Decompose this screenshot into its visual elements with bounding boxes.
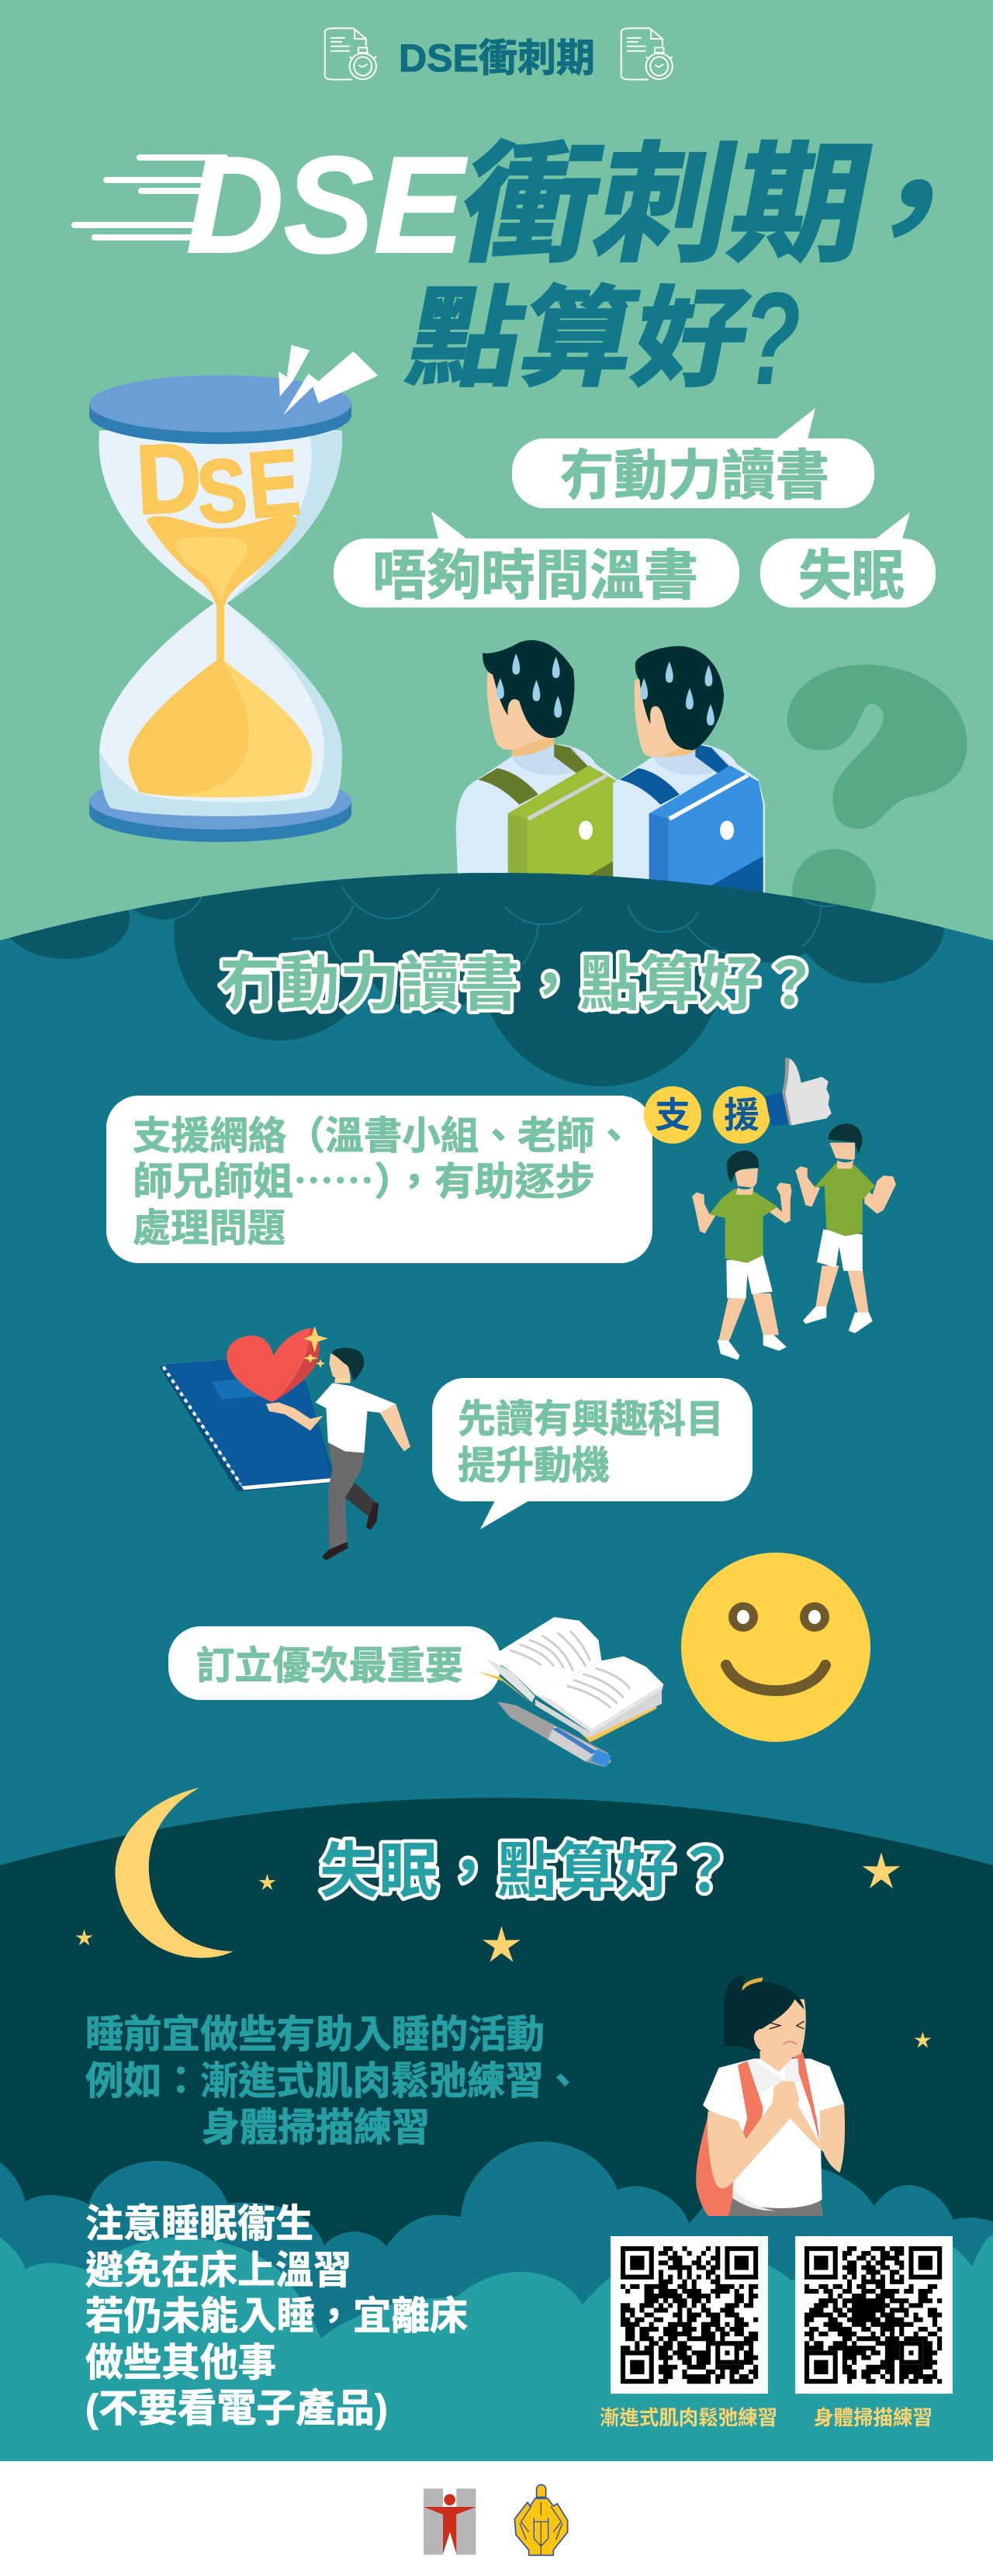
callout: support network: 師兄師姐……），有助逐步 bbox=[133, 1151, 595, 1207]
callout: interest subjects: 先讀有興趣科目 bbox=[458, 1397, 724, 1441]
support badges: 援 bbox=[724, 1095, 759, 1135]
callout: support network: 處理問題 bbox=[133, 1207, 285, 1250]
student front-left bbox=[692, 1151, 791, 1360]
text block: bedtime activities: 睡前宜做些有助入睡的活動 bbox=[85, 2013, 545, 2056]
night section background bbox=[0, 1798, 993, 2483]
cloud layer front bbox=[0, 2235, 993, 2463]
dark scalloped canopy bbox=[11, 873, 945, 1086]
support badges: 支 bbox=[655, 1095, 690, 1135]
section heading: insomnia: 失眠，點算好？ bbox=[320, 1837, 735, 1905]
title line two: 點算好 bbox=[399, 278, 759, 400]
glass bbox=[99, 431, 342, 816]
student left with green backpack bbox=[456, 640, 624, 912]
book bbox=[535, 1704, 657, 1743]
notebook bbox=[160, 1353, 336, 1491]
text block: sleep hygiene: 若仍未能入睡，宜離床 bbox=[85, 2294, 468, 2338]
two students cheering bbox=[692, 1124, 896, 1360]
girl thinking bbox=[696, 1975, 845, 2216]
text block: sleep hygiene: 做些其他事 bbox=[85, 2341, 276, 2384]
lightning bbox=[279, 345, 378, 416]
header bbox=[325, 28, 673, 80]
callout: interest subjects: 提升動機 bbox=[458, 1444, 610, 1487]
callout: support network: 支援網絡（溫書小組、老師、 bbox=[133, 1114, 633, 1158]
icon: document with stopwatch left bbox=[325, 28, 376, 79]
hourglass DSE letters: S bbox=[194, 441, 251, 542]
moon bbox=[116, 1788, 233, 1958]
DSE white: DSE bbox=[186, 128, 468, 282]
upper sand bbox=[147, 515, 297, 660]
student back-right bbox=[795, 1124, 896, 1333]
QR code: body scan bbox=[795, 2236, 953, 2394]
teal section background bbox=[0, 873, 993, 2483]
open book and pen bbox=[476, 1617, 663, 1767]
text block: bedtime activities bbox=[85, 2013, 582, 2149]
running student bbox=[266, 1348, 410, 1560]
title question mark: ? bbox=[743, 265, 801, 413]
hourglass bbox=[89, 345, 378, 842]
footer bbox=[0, 2461, 993, 2576]
hourglass DSE letters: D bbox=[133, 422, 204, 535]
notebook with heart and student bbox=[160, 1326, 410, 1560]
callout: priorities: 訂立優次最重要 bbox=[196, 1644, 463, 1688]
bubble: not enough time: 唔夠時間溫書 bbox=[372, 545, 698, 606]
bubble: no motivation: 冇動力讀書 bbox=[560, 445, 829, 506]
text block: sleep hygiene: 注意睡眠衞生 bbox=[85, 2202, 313, 2245]
QR label: body scan: 身體掃描練習 bbox=[814, 2406, 932, 2429]
bottom cap bbox=[89, 773, 351, 842]
lower sand bbox=[129, 658, 312, 798]
stars bbox=[76, 1852, 931, 2048]
callout: priorities bbox=[168, 1626, 500, 1700]
bubble: insomnia: 失眠 bbox=[798, 545, 905, 606]
QR code: progressive muscle relaxation bbox=[611, 2236, 768, 2394]
hourglass DSE letters: E bbox=[244, 430, 304, 538]
QR label: progressive muscle relaxation: 漸進式肌肉鬆弛練習 bbox=[600, 2406, 777, 2429]
callout: support network bbox=[106, 1096, 652, 1263]
text block: sleep hygiene bbox=[85, 2202, 468, 2430]
icon: document with stopwatch right bbox=[621, 28, 673, 79]
student right with blue backpack bbox=[613, 646, 765, 912]
bubble: insomnia bbox=[760, 512, 936, 608]
bubble: not enough time bbox=[334, 511, 739, 608]
question mark decoration bbox=[787, 664, 967, 931]
cloud layer back bbox=[0, 2141, 993, 2463]
top cap bbox=[89, 376, 351, 444]
logo: yellow hands bbox=[514, 2484, 568, 2555]
text block: bedtime activities: 身體掃描練習 bbox=[202, 2106, 430, 2149]
heart bbox=[227, 1328, 320, 1402]
logo: red figure on grey bbox=[424, 2488, 476, 2555]
callout: interest subjects bbox=[432, 1378, 753, 1529]
pen bbox=[497, 1702, 611, 1767]
sparkles bbox=[303, 1326, 328, 1368]
header title: DSE衝刺期 bbox=[399, 36, 595, 80]
speed lines bbox=[74, 158, 225, 237]
text block: sleep hygiene: (不要看電子產品) bbox=[85, 2387, 388, 2430]
title line one: 衝刺期 bbox=[449, 131, 883, 278]
text block: bedtime activities: 例如：漸進式肌肉鬆弛練習、 bbox=[85, 2059, 582, 2103]
main title bbox=[74, 123, 993, 413]
bubble: no motivation bbox=[512, 408, 874, 508]
icon: thumbs up bbox=[765, 1058, 832, 1127]
smiley face bbox=[681, 1553, 870, 1742]
section heading: no motivation: 冇動力讀書，點算好？ bbox=[220, 950, 820, 1018]
support badges bbox=[644, 1086, 770, 1144]
hourglass DSE letters bbox=[133, 422, 304, 542]
text block: sleep hygiene: 避免在床上溫習 bbox=[85, 2249, 351, 2292]
speech bubbles bbox=[334, 408, 936, 608]
